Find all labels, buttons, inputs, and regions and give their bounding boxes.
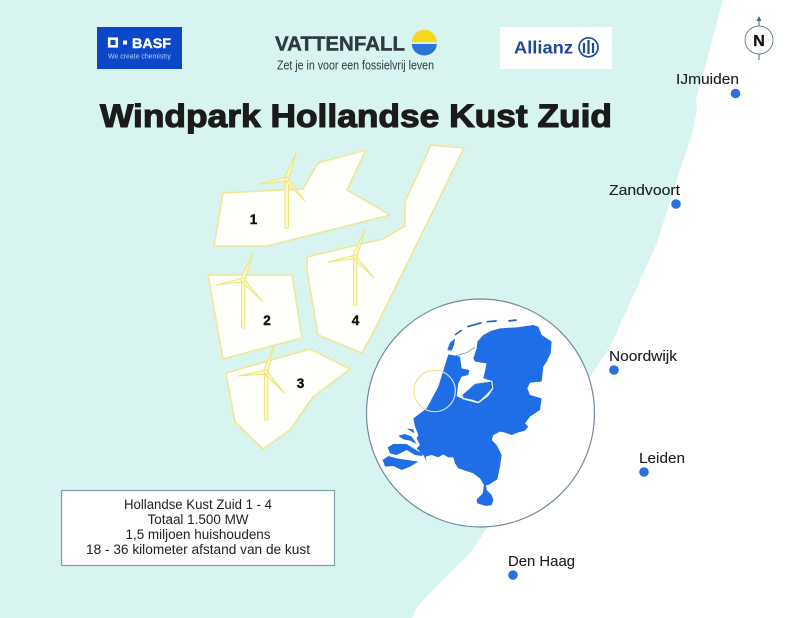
city: IJmuiden: IJmuiden <box>676 71 739 88</box>
city: Zandvoort: Zandvoort <box>609 182 681 199</box>
info box: Hollandse Kust Zuid 1 - 4 <box>124 497 273 512</box>
wind zone 2 <box>208 275 302 359</box>
wind turbine zone 1 <box>259 153 305 228</box>
zone number 4: 4 <box>352 313 360 328</box>
logo: BASF <box>97 27 182 69</box>
info box: 1,5 miljoen huishoudens <box>126 527 271 542</box>
city: Leiden: Leiden <box>639 450 685 467</box>
wind zone 3 <box>226 349 350 449</box>
wind turbine zone 3 <box>238 345 284 420</box>
compass: north: N <box>753 33 765 50</box>
city: Zandvoort <box>609 182 681 209</box>
info box: 18 - 36 kilometer afstand van de kust <box>86 542 310 557</box>
info box <box>62 490 334 566</box>
info box: Totaal 1.500 MW <box>148 512 249 527</box>
compass: north <box>745 16 773 60</box>
logo: BASF: BASF <box>132 36 171 51</box>
logo: Vattenfall: Zet je in voor een fossielvrij leven <box>277 58 434 72</box>
city: Noordwijk: Noordwijk <box>609 348 678 365</box>
map: Netherlands <box>383 320 552 506</box>
wind zone 4 <box>307 145 464 353</box>
city: Den Haag: Den Haag <box>508 553 575 570</box>
zone number 1: 1 <box>250 212 258 227</box>
wind turbine zone 2 <box>216 253 263 328</box>
logo: Allianz: Allianz <box>514 38 573 58</box>
zone number 2: 2 <box>263 313 271 328</box>
inset circle: map of the Netherlands <box>366 299 594 527</box>
location marker circle <box>414 370 455 412</box>
city: Leiden <box>639 450 685 477</box>
title: Windpark Hollandse Kust Zuid <box>100 98 612 134</box>
logo: Vattenfall <box>275 30 437 73</box>
logo: BASF: We create chemistry <box>108 52 171 60</box>
wind zone 1 <box>214 150 390 246</box>
logo: Allianz <box>500 27 612 69</box>
wind turbine zone 4 <box>328 230 374 305</box>
city: IJmuiden <box>676 71 740 98</box>
zone number 3: 3 <box>297 376 305 391</box>
city: Noordwijk <box>609 348 678 375</box>
logo: Vattenfall: VATTENFALL <box>275 34 405 56</box>
city: Den Haag <box>508 553 575 580</box>
